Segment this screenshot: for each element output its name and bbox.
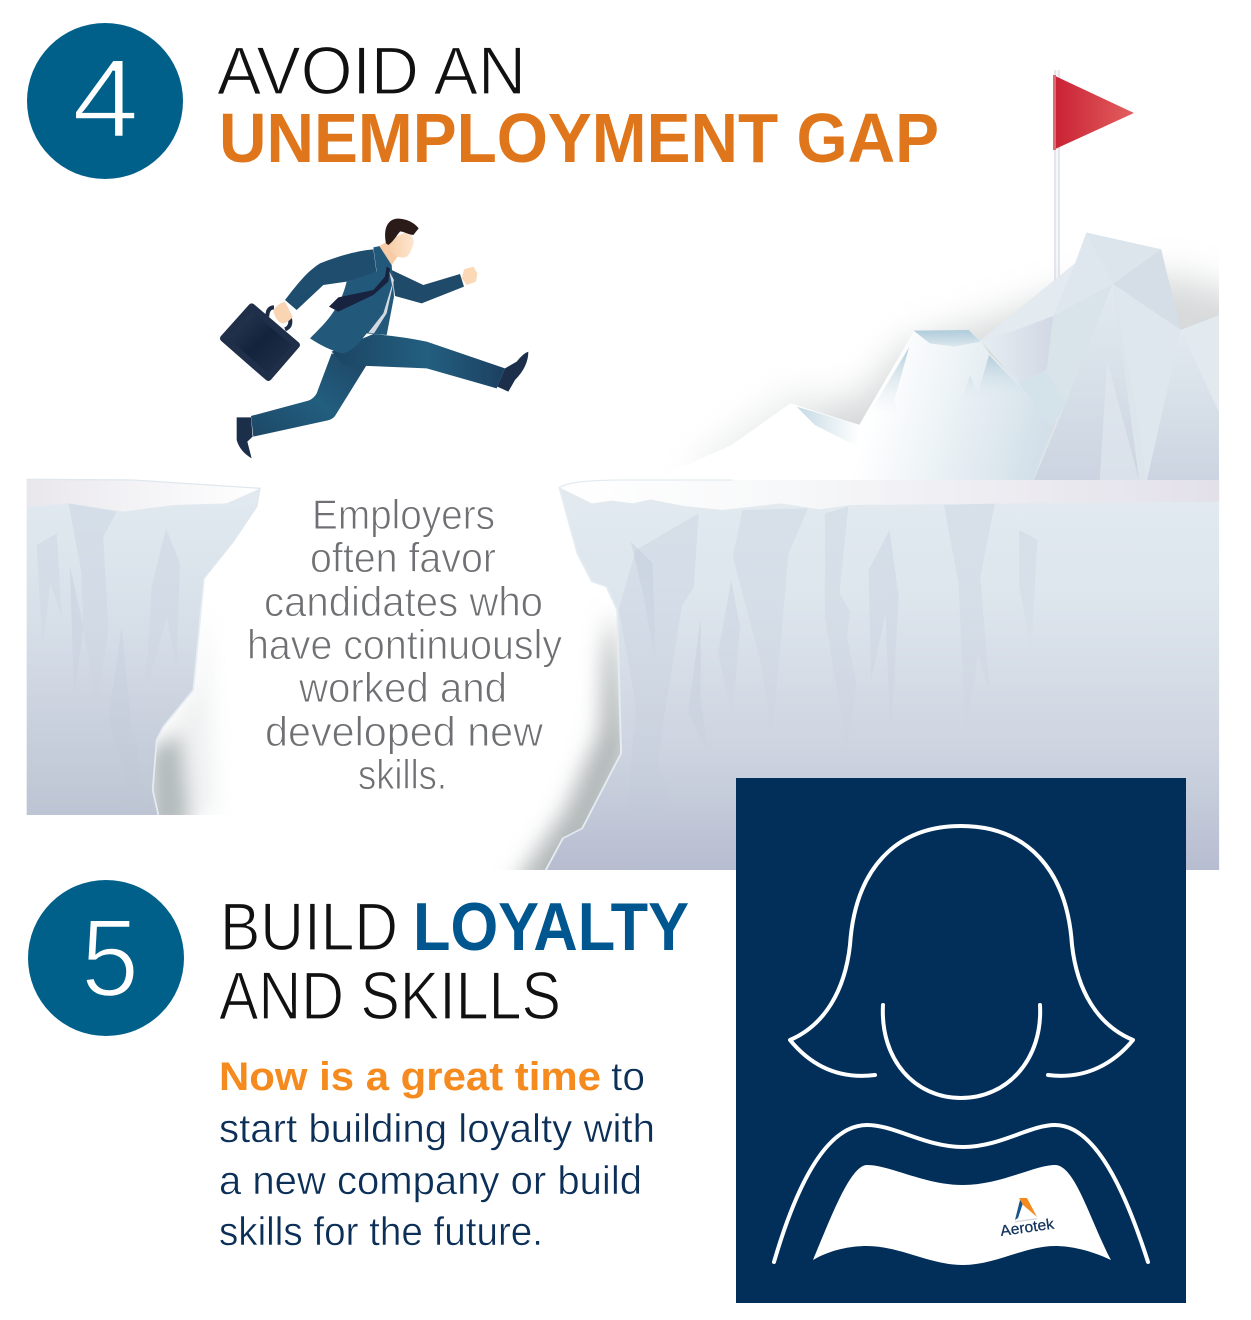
- title: build loyalty and skills: AND SKILLS: [219, 958, 561, 1034]
- icon: shoulders outline: [774, 1125, 1148, 1262]
- briefcase handle: [267, 307, 290, 329]
- front arm: [392, 270, 464, 303]
- illustration: jumping businessman: [223, 219, 528, 458]
- tall peak: [982, 232, 1152, 480]
- title: build loyalty and skills: BUILD: [220, 889, 398, 965]
- body text: employers favor continuous work: Employers: [312, 491, 495, 538]
- panel: navy employee portrait: [736, 778, 1186, 1303]
- briefcase: [223, 307, 297, 378]
- icon: shirt: [813, 1165, 1111, 1265]
- face: [390, 231, 414, 258]
- text block: now is a great time: a new company or build: [219, 1159, 642, 1203]
- back leg: [251, 353, 367, 437]
- logo: Aerotek: [999, 1198, 1056, 1240]
- title: build loyalty and skills: [219, 889, 689, 1034]
- title: avoid an unemployment gap: UNEMPLOYMENT GAP: [219, 99, 939, 177]
- number badge 4: [27, 23, 183, 179]
- body text: employers favor continuous work: skills.: [358, 751, 447, 798]
- text block: now is a great time: start building loyalty with: [219, 1107, 655, 1151]
- front hand: [462, 267, 477, 285]
- neck: [379, 240, 400, 265]
- text block: now is a great time: skills for the future.: [219, 1210, 543, 1254]
- number badge 5: 5: [81, 897, 139, 1020]
- body text: employers favor continuous work: [247, 491, 562, 798]
- back arm: [285, 249, 377, 310]
- back shoe: [237, 417, 253, 458]
- title: avoid an unemployment gap: AVOID AN: [217, 33, 526, 109]
- body text: employers favor continuous work: candidates who: [264, 578, 543, 625]
- body text: employers favor continuous work: often favor: [310, 534, 496, 581]
- body text: employers favor continuous work: developed new: [265, 708, 544, 755]
- shirt: [368, 272, 394, 333]
- back hand: [273, 302, 293, 323]
- tie: [329, 267, 390, 312]
- icon: red flag on pole: [1053, 70, 1134, 285]
- illustration: ice mountains: [706, 232, 1219, 480]
- text block: now is a great time: to: [611, 1055, 645, 1099]
- body text: employers favor continuous work: worked and: [298, 664, 507, 711]
- middle peak: [860, 333, 1052, 480]
- front leg: [332, 334, 505, 388]
- illustration: right ice cliff with gap shadow: [510, 480, 1219, 890]
- icon: hair outline: [790, 826, 1133, 1076]
- text block: now is a great time: [219, 1055, 655, 1254]
- number badge 5: [28, 880, 184, 1036]
- illustration: left ice cliff: [27, 479, 260, 830]
- icon: face outline: [883, 1005, 1040, 1098]
- number badge 4: 4: [72, 36, 139, 161]
- jacket: [310, 246, 394, 353]
- logo: Aerotek: Aerotek: [999, 1216, 1056, 1240]
- title: avoid an unemployment gap: [217, 33, 939, 177]
- body text: employers favor continuous work: have continuously: [247, 621, 562, 668]
- front shoe: [497, 352, 528, 392]
- snow hill: [703, 404, 860, 480]
- text block: now is a great time: Now is a great time: [219, 1055, 601, 1099]
- hair: [385, 219, 419, 245]
- title: build loyalty and skills: LOYALTY: [413, 889, 689, 965]
